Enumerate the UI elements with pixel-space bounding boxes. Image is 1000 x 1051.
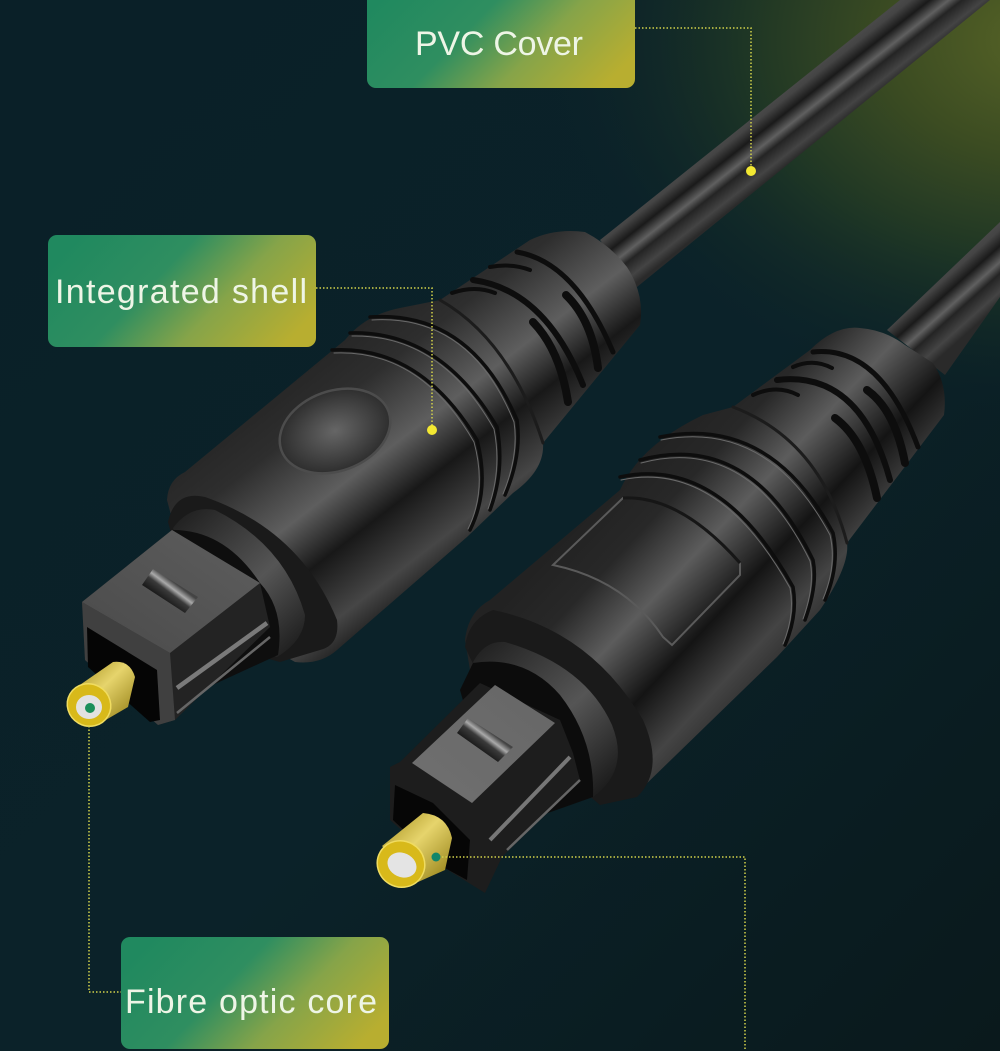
cable: lower xyxy=(887,222,1000,375)
collar xyxy=(460,610,653,830)
gold ferrule xyxy=(369,813,452,896)
body xyxy=(465,328,945,801)
callout: Fibre optic core: Fibre optic core xyxy=(125,983,377,1021)
callout: PVC Cover xyxy=(367,0,756,176)
callout: Integrated shell xyxy=(48,235,437,435)
tab xyxy=(142,569,198,613)
right connector xyxy=(369,328,945,896)
ribs and slots xyxy=(332,252,613,530)
left connector xyxy=(59,231,641,734)
body xyxy=(167,231,641,662)
ribs and slots xyxy=(620,352,918,645)
callout: Fibre optic core xyxy=(89,726,389,1049)
collar xyxy=(165,496,337,700)
button xyxy=(268,374,402,488)
plug xyxy=(390,683,580,893)
tab xyxy=(457,718,513,762)
callout: Integrated shell: Integrated shell xyxy=(55,273,307,311)
cable: upper xyxy=(600,0,990,287)
gold ferrule xyxy=(59,662,135,734)
plug xyxy=(82,530,270,725)
rectangular patch xyxy=(553,498,740,645)
leader line: ferrule xyxy=(442,857,745,1051)
callout: PVC Cover: PVC Cover xyxy=(415,25,583,63)
